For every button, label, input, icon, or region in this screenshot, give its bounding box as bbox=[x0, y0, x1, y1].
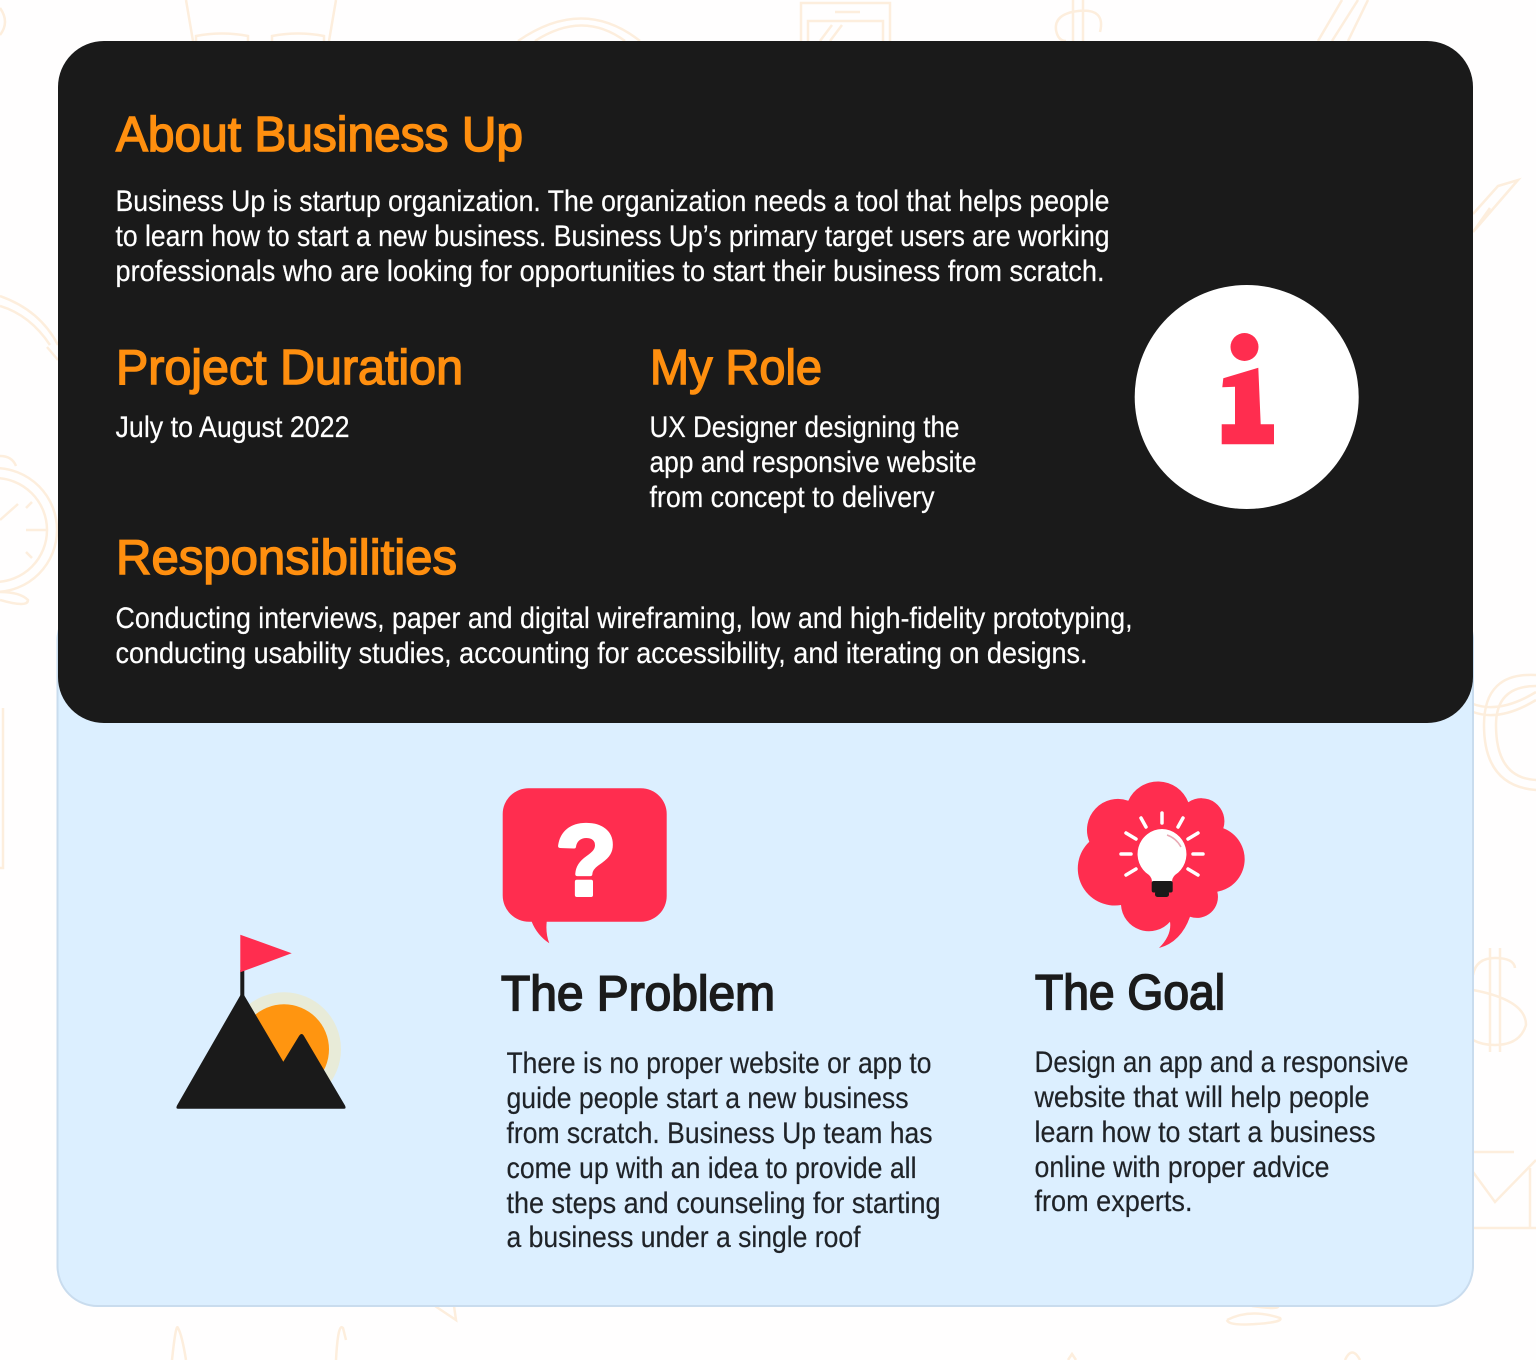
text: problem description: from scratch. Business Up team has bbox=[506, 1117, 932, 1150]
heading: My Role: My Role bbox=[650, 340, 822, 395]
text: role: app and responsive website bbox=[650, 446, 976, 479]
text: about description: Business Up is startup organization. The organization needs a tool that helps people bbox=[116, 185, 1110, 218]
text: role: from concept to delivery bbox=[650, 481, 935, 514]
text: role: UX Designer designing the bbox=[650, 411, 960, 444]
panel: about bbox=[58, 41, 1473, 723]
text: responsibilities: conducting usability studies, accounting for accessibility, and iterating on designs. bbox=[116, 637, 1088, 670]
heading: The Goal: The Goal bbox=[1035, 965, 1225, 1020]
text: about description: to learn how to start a new business. Business Up’s primary target users are working bbox=[116, 220, 1110, 253]
text: problem description bbox=[506, 1047, 940, 1254]
icon: question speech bubble bbox=[503, 788, 667, 943]
text: problem description: a business under a single roof bbox=[506, 1221, 861, 1254]
text: about description bbox=[116, 185, 1110, 288]
heading: Responsibilities: Responsibilities bbox=[116, 530, 457, 585]
heading: The Problem: The Problem bbox=[501, 966, 775, 1021]
text: about description: professionals who are looking for opportunities to start their business from scratch. bbox=[116, 255, 1104, 288]
text: goal description: Design an app and a responsive bbox=[1034, 1046, 1408, 1079]
text: goal description: from experts. bbox=[1034, 1185, 1192, 1218]
text: problem description: come up with an idea to provide all bbox=[506, 1152, 916, 1185]
text: responsibilities bbox=[116, 602, 1132, 670]
text: duration: July to August 2022 bbox=[116, 411, 350, 444]
text: goal description bbox=[1034, 1046, 1408, 1218]
text: problem description: the steps and counseling for starting bbox=[506, 1187, 940, 1220]
text: problem description: guide people start a new business bbox=[506, 1082, 908, 1115]
icon: info circle bbox=[1135, 285, 1359, 509]
text: responsibilities: Conducting interviews, paper and digital wireframing, low and high-fidelity prototyping, bbox=[116, 602, 1132, 635]
icon: mountain with flag and sun bbox=[176, 935, 346, 1109]
heading: About Business Up: About Business Up bbox=[116, 107, 523, 162]
text: goal description: website that will help people bbox=[1034, 1081, 1370, 1114]
icon: question speech bubble: ? bbox=[555, 805, 617, 917]
heading: Project Duration: Project Duration bbox=[116, 340, 463, 395]
text: goal description: online with proper advice bbox=[1034, 1151, 1330, 1184]
text: role bbox=[650, 411, 976, 514]
text: problem description: There is no proper website or app to bbox=[506, 1047, 932, 1080]
icon: light bulb thought cloud bbox=[1078, 781, 1245, 948]
panel: problem and goal bbox=[58, 600, 1473, 1306]
text: goal description: learn how to start a business bbox=[1034, 1116, 1376, 1149]
